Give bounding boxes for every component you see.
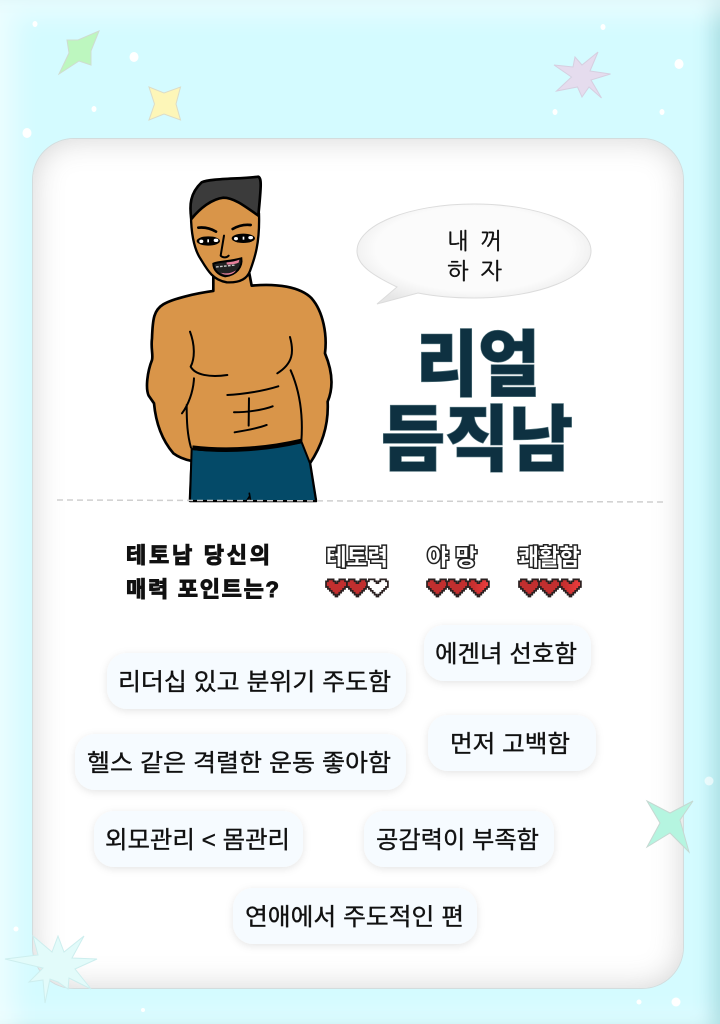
chip: lacks empathy: 공감력이 부족함 (376, 827, 539, 854)
chip: body care: 외모관리 < 몸관리 (105, 827, 290, 854)
icon: pale burst star (5, 936, 97, 1003)
chip: intense exercise: 헬스 같은 격렬한 운동 좋아함 (87, 750, 391, 777)
chip: confess first: 먼저 고백함 (450, 731, 570, 758)
speech bubble (357, 204, 591, 304)
chip: leadership (107, 653, 406, 709)
mouth (213, 258, 242, 276)
chip: intense exercise (75, 734, 406, 790)
head (191, 196, 259, 282)
stat: teto power: 테토력 (326, 544, 388, 570)
stat: teto power (326, 544, 388, 596)
chip: confess first (428, 715, 596, 771)
chip: lacks empathy (364, 811, 554, 867)
divider (57, 500, 665, 502)
hair (190, 177, 261, 219)
icon: green star (59, 31, 99, 74)
panel: white card (32, 138, 684, 989)
icon: yellow star (149, 87, 180, 120)
speech text: 내 꺼 (447, 228, 502, 254)
pants (190, 442, 316, 501)
title: 리얼 (416, 326, 540, 406)
stat: desire (427, 544, 489, 596)
stat: cheerfulness: 쾌활함 (518, 544, 580, 570)
stat: cheerfulness (518, 544, 581, 596)
chip: takes the lead in dating: 연애에서 주도적인 편 (245, 904, 464, 931)
heading: charm points (126, 543, 279, 602)
eyes (197, 236, 220, 246)
illustration: muscular man (147, 177, 331, 501)
belt (192, 441, 301, 450)
chip: body care (94, 811, 303, 867)
icon: mint star (647, 801, 693, 852)
heading: charm points: 테토남 당신의 (126, 543, 270, 568)
body (147, 273, 331, 501)
title (381, 326, 573, 481)
brows and nose (198, 225, 251, 232)
chip: leadership: 리더십 있고 분위기 주도함 (118, 669, 391, 696)
title: 듬직남 (381, 401, 573, 481)
stat: desire: 야 망 (427, 544, 477, 570)
chip: takes the lead in dating (233, 888, 477, 944)
chip: egen preference: 에겐녀 선호함 (435, 641, 577, 668)
heading: charm points: 매력 포인트는? (126, 577, 279, 602)
speech bubble: 하 자 (447, 258, 502, 284)
icon: purple star (554, 52, 610, 98)
torso lines (182, 332, 302, 448)
chip: egen preference (424, 625, 591, 681)
